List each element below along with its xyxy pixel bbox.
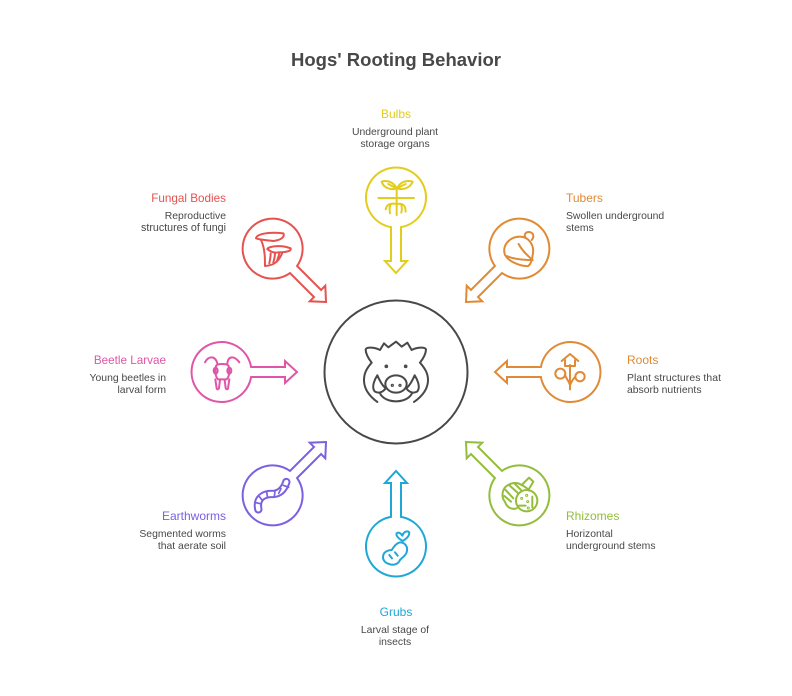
icon: tuber xyxy=(504,232,533,266)
arrow: earthworms xyxy=(230,421,347,538)
label: tubers: stems xyxy=(566,223,594,234)
label: beetle larvae xyxy=(90,354,166,396)
arrow: tubers xyxy=(445,206,562,323)
icon: earthworm xyxy=(256,482,289,509)
label: bulbs: Underground plant xyxy=(352,127,438,138)
icon: mushrooms xyxy=(256,233,291,266)
label: bulbs: storage organs xyxy=(360,139,430,150)
arrow: roots xyxy=(495,342,600,402)
label: beetle larvae: larval form xyxy=(118,385,166,396)
label: grubs xyxy=(361,605,429,648)
label: grubs: insects xyxy=(379,637,411,648)
icon: sprout xyxy=(378,181,414,215)
center circle xyxy=(324,300,468,444)
label: tubers: Swollen underground xyxy=(566,211,664,222)
label: rhizomes xyxy=(566,509,656,552)
label: roots: Roots xyxy=(627,353,658,367)
label: bulbs: Bulbs xyxy=(381,107,411,121)
label: beetle larvae: Young beetles in xyxy=(90,373,166,384)
label: earthworms xyxy=(139,509,226,552)
panel: fungal bodies xyxy=(141,192,347,323)
panel: rhizomes xyxy=(445,421,656,552)
icon: rhizome xyxy=(502,478,537,511)
label: roots xyxy=(627,353,721,396)
label: tubers: Tubers xyxy=(566,191,603,205)
icon: root plant xyxy=(555,354,585,389)
panel: beetle larvae xyxy=(90,342,297,402)
label: roots: absorb nutrients xyxy=(627,385,702,396)
label: tubers xyxy=(566,191,664,234)
arrow: bulbs xyxy=(366,168,426,273)
panel: tubers xyxy=(445,191,664,323)
arrow: grubs xyxy=(366,471,426,576)
label: rhizomes: Horizontal xyxy=(566,529,613,540)
arrow: fungal bodies xyxy=(230,206,347,323)
panel: earthworms xyxy=(139,421,347,552)
label: earthworms: that aerate soil xyxy=(158,541,226,552)
label: grubs: Grubs xyxy=(380,605,412,619)
label: grubs: Larval stage of xyxy=(361,625,429,636)
label: rhizomes: underground stems xyxy=(566,541,656,552)
icon: grub xyxy=(383,531,409,565)
arrow: rhizomes xyxy=(445,421,562,538)
center circle with boar xyxy=(324,300,468,444)
icon: larva head xyxy=(205,357,239,389)
label: earthworms: Earthworms xyxy=(162,509,226,523)
label: roots: Plant structures that xyxy=(627,373,721,384)
panel: bulbs xyxy=(352,107,438,273)
panel: roots xyxy=(495,342,721,402)
label: fungal bodies: Fungal Bodies xyxy=(151,192,226,205)
label: bulbs xyxy=(352,107,438,150)
label: fungal bodies: Reproductive xyxy=(165,211,226,222)
label: rhizomes: Rhizomes xyxy=(566,509,619,523)
label: fungal bodies: structures of fungi xyxy=(141,222,226,234)
label: earthworms: Segmented worms xyxy=(139,529,226,540)
label: beetle larvae: Beetle Larvae xyxy=(94,354,166,367)
icon: boar head xyxy=(364,342,428,402)
arrow: beetle larvae xyxy=(192,342,297,402)
label: fungal bodies xyxy=(141,192,226,234)
panel: grubs xyxy=(361,471,429,648)
title: Hogs' Rooting Behavior xyxy=(291,49,501,70)
